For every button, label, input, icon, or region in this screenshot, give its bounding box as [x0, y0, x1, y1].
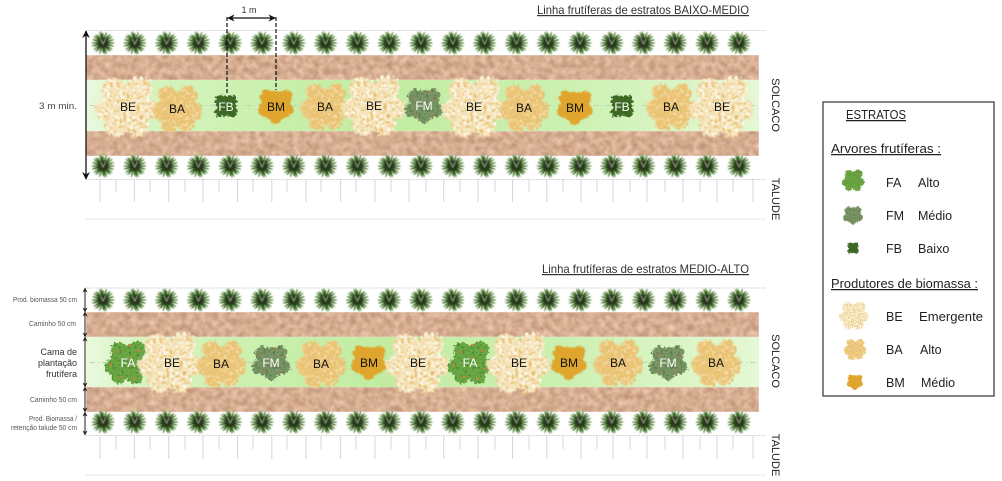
tree BE: BE [164, 356, 180, 370]
tree BE [487, 333, 551, 393]
label: Cama de plantação frutífera: Cama de [40, 347, 77, 357]
lower planting bed [86, 337, 759, 387]
upper path band top [86, 55, 759, 80]
lower slope ticks [100, 436, 753, 459]
tree BA: BA [516, 101, 532, 115]
label: Caminho 50 cm: Caminho 50 cm [30, 397, 77, 404]
lower biomass row top [92, 289, 750, 311]
panel: legend ESTRATOS [823, 102, 994, 396]
tree FA [448, 341, 493, 384]
legend item FB: FB [886, 242, 902, 256]
tree FB [611, 95, 633, 117]
tree FM: FM [659, 356, 677, 370]
tree BA [152, 86, 202, 132]
legend item FB: Baixo [918, 242, 949, 256]
tree BM: BM [267, 100, 285, 114]
label: Caminho 50 cm: Caminho 50 cm [29, 321, 76, 328]
legend item FM: Médio [918, 209, 952, 223]
tree FA: FA [463, 356, 477, 370]
dimension arrows [84, 288, 86, 435]
tree BA [646, 84, 696, 130]
tree BA: BA [169, 102, 185, 116]
upper slope ticks [100, 179, 753, 202]
label: TALUDE: TALUDE [769, 434, 781, 476]
tree BE [342, 76, 406, 136]
legend item FA [842, 170, 940, 191]
arrow: 1 m spacing [227, 5, 276, 94]
label: Cama de plantação frutífera: frutífera [46, 369, 77, 379]
lower bed centre line [90, 362, 755, 364]
tree BE [690, 77, 754, 137]
tree BA [196, 341, 246, 387]
tree BA: BA [708, 356, 724, 370]
label: 3 m min.: 3 m min. [39, 101, 77, 111]
legend item BM: BM [886, 376, 905, 390]
upper planting bed [86, 80, 759, 131]
upper boundary line [86, 30, 765, 32]
tree BA [300, 84, 350, 130]
heading: upper line title: Linha frutíferas de estratos BAIXO-MEDIO [537, 3, 749, 17]
legend item BE: BE [886, 310, 903, 324]
tree BE: BE [366, 99, 382, 113]
tree BE [442, 77, 506, 137]
label: Prod. Biomassa / retenção talude 50 cm [11, 416, 77, 432]
tree FB: FB [614, 100, 630, 114]
tree BE: BE [511, 356, 527, 370]
label: Prod. biomassa 50 cm: Prod. biomassa 50 cm [13, 297, 77, 304]
label: Prod. Biomassa / retenção talude 50 cm: retenção talude 50 cm [11, 425, 77, 432]
upper lower boundary line [86, 178, 765, 180]
lower slope base line [86, 474, 765, 476]
tree BA [296, 341, 346, 387]
tree FM [405, 89, 443, 123]
tree FM: FM [415, 99, 433, 113]
tree FA [105, 341, 150, 384]
legend item FM: FM [886, 209, 904, 223]
tree BE [95, 77, 159, 137]
tree BM [551, 346, 587, 380]
panel: lower planting line, medium to high strata [11, 262, 781, 476]
label: SOLCACO: SOLCACO [769, 334, 781, 388]
tree BE: BE [410, 356, 426, 370]
tree BA: BA [317, 100, 333, 114]
legend box [823, 102, 994, 396]
tree BA: BA [213, 357, 229, 371]
tree BE: BE [714, 100, 730, 114]
tree BA [691, 340, 741, 386]
legend item BM: Médio [921, 376, 955, 390]
tree BA: BA [313, 357, 329, 371]
tree FA: FA [121, 356, 135, 370]
legend heading: fruit trees: Arvores frutíferas : [831, 142, 941, 156]
tree BA [499, 85, 549, 131]
tree BE [138, 333, 202, 393]
tree BE: BE [466, 100, 482, 114]
legend item FA: Alto [918, 176, 940, 190]
tree FM: FM [262, 356, 280, 370]
tree BM: BM [566, 101, 584, 115]
legend title: ESTRATOS [846, 108, 906, 122]
tree BM [557, 91, 593, 125]
upper biomass row top [92, 32, 750, 54]
label: Cama de plantação frutífera [38, 347, 77, 379]
lower path band top [86, 312, 759, 337]
legend item FM [843, 207, 952, 224]
arrow: 3 m width [85, 31, 87, 179]
tree BE: BE [120, 100, 136, 114]
tree BM: BM [360, 356, 378, 370]
upper path band bottom [86, 131, 759, 156]
tree FB [215, 95, 237, 117]
arrow: 1 m spacing: 1 m [241, 5, 257, 15]
tree FM [649, 346, 687, 380]
label: TALUDE: TALUDE [769, 178, 781, 220]
panel: upper planting line, low to medium strata [39, 3, 781, 220]
tree BM [258, 90, 294, 124]
legend item FB [848, 242, 949, 256]
label: SOLCACO: SOLCACO [769, 78, 781, 132]
legend item BA [844, 339, 942, 360]
upper biomass row bottom [92, 155, 750, 177]
lower path band bottom [86, 387, 759, 412]
legend item BA: Alto [920, 343, 942, 357]
legend item BE [839, 302, 983, 329]
label: Cama de plantação frutífera: plantação [38, 358, 77, 368]
legend heading: biomass producers: Produtores de biomassa : [831, 277, 978, 291]
upper bed centre line [90, 104, 755, 106]
upper slope base line [86, 218, 765, 220]
tree BM [351, 346, 387, 380]
tree BM: BM [560, 356, 578, 370]
lower boundary line [86, 287, 765, 289]
lower biomass row bottom [92, 411, 750, 433]
tree BA [593, 340, 643, 386]
tree BA: BA [663, 100, 679, 114]
legend item BM [847, 375, 955, 390]
legend item BA: BA [886, 343, 903, 357]
label: Prod. Biomassa / retenção talude 50 cm: Prod. Biomassa / [29, 416, 77, 423]
tree FM [252, 346, 290, 380]
legend item BE: Emergente [919, 310, 983, 324]
tree BA: BA [610, 356, 626, 370]
legend item FA: FA [886, 176, 902, 190]
tree BE [386, 333, 450, 393]
heading: lower line title: Linha frutíferas de estratos MEDIO-ALTO [542, 262, 749, 276]
tree FB: FB [218, 100, 234, 114]
lower lower boundary line [86, 434, 765, 436]
